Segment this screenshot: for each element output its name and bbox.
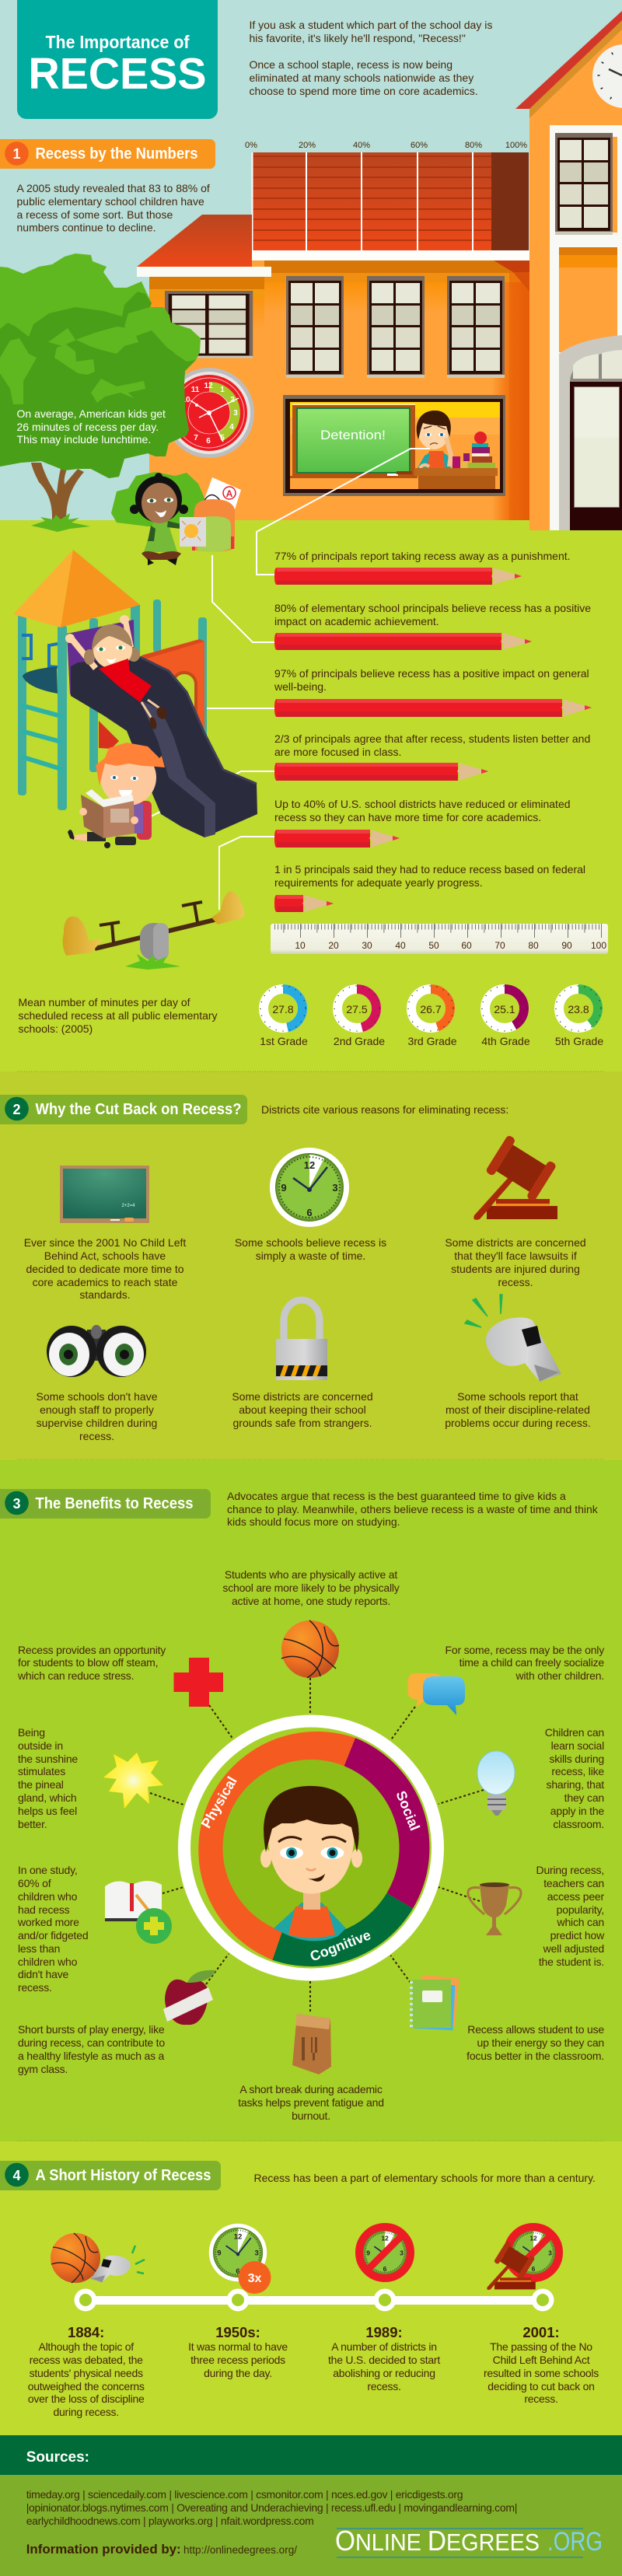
red wall clock [164,368,254,458]
icon: 1950s clock three times: 3x [248,2272,261,2285]
text: socialize: with other children. [515,1669,604,1682]
ruler: 40 [395,940,406,951]
benefit: trophy [468,1882,521,1935]
reason: chalkboard: standards. [79,1288,131,1301]
study text: public elementary school children have [17,195,204,208]
text: social skills: skills during [549,1753,604,1765]
handles [22,635,58,667]
roof scale labels: 0% [245,141,257,150]
3rd grade: 3rd Grade [407,1035,457,1047]
text: peer popularity: predict how [550,1929,605,1942]
roof scale labels: 40% [353,141,370,150]
timeline text: 1989: A number of districts in [331,2340,437,2353]
timeline text: 1884: Although the topic of [38,2340,134,2353]
text: social skills: classroom. [553,1818,604,1830]
text: gym class: Short bursts of play energy, like [18,2023,165,2036]
playground structure [13,550,257,837]
source links: |opinionator.blogs.nytimes.com | Overeating and Underachieving | recess.ufl.edu | movingandlearning.com| [26,2501,517,2514]
callout lines [135,449,430,910]
grass tuft [31,513,90,532]
posts [18,599,207,810]
text: sunshine: gland, which [18,1791,76,1804]
stat 40%: recess so they can have more time for core academics. [274,811,541,823]
girl on slide [65,615,169,730]
reason: chalkboard: Behind Act, schools have [44,1250,166,1262]
reason: gavel: students are injured during [451,1263,580,1275]
section 3 intro: kids should focus more on studying. [227,1515,400,1528]
ruler: 80 [528,940,539,951]
reason: padlock: grounds safe from strangers. [233,1417,372,1429]
red wall clock: 6 [206,437,211,446]
1st grade: 1st Grade [260,1035,308,1047]
timeline text: 1884: outweighed the concerns [28,2380,145,2392]
stat 77% [274,550,571,585]
reason: binoculars [36,1325,158,1442]
boy reading [68,743,165,848]
text: physically active: school are more likely to be physically [222,1582,400,1594]
ruler: 70 [494,940,505,951]
5th grade: 23.8 [568,1003,589,1015]
icon: 1989 prohibited clock [359,2227,411,2278]
reason: binoculars: recess. [79,1430,114,1442]
text: sunshine: helps us feel [18,1805,77,1817]
text: social skills: sharing, that [547,1778,604,1791]
tree caption: This may include lunchtime. [17,433,151,446]
text: gym class: a healthy lifestyle as much as a [18,2050,165,2062]
wheel labels: Physical [198,1774,240,1831]
benefit: red cross [174,1658,223,1707]
section 2 heading [0,1095,247,1124]
text: stress: for students to blow off steam, [18,1656,158,1669]
stat 80% [274,602,591,650]
girl with drawing [130,473,241,565]
timeline text: 1884 [28,2324,145,2418]
red wall clock: 11 [191,386,200,394]
benefit: apple with tape [163,1970,216,2025]
text: sunshine: better. [18,1818,47,1830]
text: social skills: recess, like [551,1765,604,1777]
reason: whistle: most of their discipline-related [446,1403,590,1416]
stat 80%: impact on academic achievement. [274,615,439,627]
text: sunshine: Being [18,1726,45,1739]
timeline text: 1884: 1884: [68,2324,104,2340]
chalkboard: Detention! [320,428,386,442]
timeline text: 1989: recess. [367,2380,401,2392]
study text: numbers continue to decline. [17,221,156,233]
intro text: eliminated at many schools nationwide as they [249,72,473,84]
intro text [249,19,492,97]
roof [13,550,140,627]
reason: gavel: that they'll face lawsuits if [454,1250,577,1262]
red wall clock: 8 [182,422,187,431]
tree caption: 26 minutes of recess per day. [17,421,159,433]
text: focus: up their energy so they can [477,2036,604,2049]
text: short break [238,2083,384,2122]
text: sunshine [18,1726,78,1830]
text: peer popularity: teachers can [543,1877,604,1889]
text: social skills: they can [564,1791,604,1804]
timeline text: 2001: deciding to cut back on [487,2380,595,2392]
reason: clock: simply a waste of time. [256,1250,365,1262]
desk [414,468,498,489]
ruler: 30 [362,940,372,951]
report card: A [226,488,233,499]
reason: gavel: recess. [498,1276,533,1288]
timeline text: 1884: during recess. [53,2406,119,2418]
benefits wheel: Social [393,1788,423,1833]
timeline text: 2001: The passing of the No [490,2340,592,2353]
text: socialize: For some, recess may be the only [446,1644,604,1656]
text: focus: focus better in the classroom. [466,2050,604,2062]
roof scale labels: 100% [505,141,527,150]
red wall clock: 12 [204,382,213,390]
boy portrait [260,1786,362,1941]
background: section 3 [0,1460,622,2141]
text: socialize: time a child can freely socialize [460,1656,604,1669]
stat 1 in 5: requirements for adequate yearly progress. [274,876,483,889]
mean minutes text: Mean number of minutes per day of [19,996,190,1008]
timeline text: 2001 [484,2324,599,2405]
reason: chalkboard: decided to dedicate more time to [26,1263,184,1275]
tree caption: On average, American kids get [17,407,166,420]
timeline [75,2289,554,2311]
title box [17,0,218,119]
text: sunshine: the sunshine [18,1753,78,1765]
backpack [192,495,235,551]
ruler: 100 [591,940,606,951]
windows [165,276,505,378]
information provided by [26,2542,297,2557]
tree caption [17,407,166,446]
benefit: speech bubbles [407,1673,465,1715]
text: social skills: Children can [545,1726,604,1739]
stat 97%: 97% of principals believe recess has a positive impact on general [274,667,589,680]
stat 97%: well-being. [274,680,327,693]
sources band [0,2435,622,2475]
background: section 2 [0,1071,622,1460]
timeline text: 2001: Child Left Behind Act [493,2354,590,2366]
2nd grade [334,986,385,1047]
ruler: 10 [295,940,306,951]
slide [71,657,257,837]
stat 1 in 5: 1 in 5 principals said they had to reduce recess based on federal [274,863,585,876]
section 2 heading: Why the Cut Back on Recess? [36,1101,241,1118]
intro text: If you ask a student which part of the school day is [249,19,492,31]
stat 2/3: are more focused in class. [274,746,401,758]
benefits wheel [178,1715,444,1981]
benefits wheel: Cognitive [308,1927,373,1964]
section 4 heading: A Short History of Recess [36,2167,211,2184]
text: focus: Recess allows student to use [467,2023,604,2036]
detention classroom window [283,395,505,496]
mean minutes text [19,996,218,1035]
roof scale labels: 80% [465,141,482,150]
text: peer popularity: popularity, [557,1903,604,1916]
background: grass section 1 [0,520,622,1071]
timeline text: 1950s: three recess periods [190,2354,285,2366]
3rd grade [407,986,457,1047]
text: focus [466,2023,604,2062]
4th grade: 4th Grade [481,1035,530,1047]
books and apple [453,432,495,468]
text: social skills [545,1726,604,1830]
reason: chalkboard [24,1166,186,1301]
reason: clock [235,1148,386,1262]
text: physically active: Students who are physically active at [225,1568,397,1581]
text: sunshine: outside in [18,1739,63,1752]
text: peer popularity: well adjusted [543,1942,604,1955]
body [142,521,181,565]
reason: binoculars: enough staff to properly [40,1403,154,1416]
text: peer popularity: the student is. [539,1956,604,1968]
red wall clock: 1 [220,386,225,394]
ruler: 90 [561,940,572,951]
orange panel [142,639,204,739]
reason: chalkboard: 2+2=4 [121,1204,135,1208]
3rd grade: 26.7 [420,1003,442,1015]
seesaw [63,891,244,970]
ruler: 50 [428,940,439,951]
logo: ONLINE DEGREES [335,2525,540,2557]
text: gym class: during recess, can contribute to [18,2036,165,2049]
donut charts [260,986,603,1047]
benefit: notebook [411,1975,460,2030]
section 3 intro: Advocates argue that recess is the best guaranteed time to give kids a [227,1490,566,1502]
mean minutes text: scheduled recess at all public elementary [19,1009,218,1022]
reason: padlock: Some districts are concerned [232,1390,373,1403]
study text: a recess of some sort. But those [17,208,173,221]
dotted connectors [150,1678,484,2014]
1st grade [260,986,308,1047]
cognitive segment [272,1893,413,1966]
physical segment [198,1732,355,1960]
tree [0,253,201,521]
timeline text: 1884: recess was debated, the [30,2354,143,2366]
reason: chalkboard: Ever since the 2001 No Child Left [24,1236,186,1249]
ruler: 20 [328,940,339,951]
intro text: Once a school staple, recess is now being [249,58,453,71]
ruler [271,924,608,954]
platform [23,666,58,694]
section 3 intro [227,1490,599,1528]
stat 77%: 77% of principals report taking recess away as a punishment. [274,550,571,562]
background: sky [0,0,622,520]
text: sunshine: stimulates [18,1765,65,1777]
reason: clock: Some schools believe recess is [235,1236,386,1249]
title box: RECESS [28,49,207,99]
text: fidgeted: In one study, [18,1864,78,1876]
bush [111,472,208,526]
text: fidgeted: recess. [18,1981,52,1994]
benefit: book with plus [105,1881,172,1944]
text: fidgeted [17,1864,88,1994]
source links: earlychildhoodnews.com | playworks.org | nfait.wordpress.com [26,2515,313,2527]
timeline text: 1989: the U.S. decided to start [328,2354,440,2366]
section 3 heading: The Benefits to Recess [36,1495,193,1512]
text: peer popularity: which can [557,1916,604,1928]
stat 2/3 [274,732,590,781]
timeline text: 2001: 2001: [522,2324,560,2340]
purple panel [67,620,135,694]
section 4 heading: 4 [12,2168,21,2183]
red wall clock: 5 [220,434,225,442]
text: fidgeted: and/or fidgeted [18,1929,88,1942]
text: stress: which can reduce stress. [17,1669,134,1682]
section 4 intro: Recess has been a part of elementary schools for more than a century. [253,2172,596,2184]
timeline text: 1989: abolishing or reducing [333,2367,435,2379]
sources band: Sources: [26,2449,89,2466]
icon: 1884 ball and whistle [51,2233,145,2283]
ladder rungs [21,705,64,770]
stat 97% [274,667,592,717]
intro text: choose to spend more time on core academics. [249,85,478,97]
mean minutes text: schools: (2005) [19,1022,93,1035]
text: sunshine: the pineal [18,1778,64,1791]
timeline text: 1884: students' physical needs [30,2367,143,2379]
roof scale labels: 60% [411,141,428,150]
main roof [252,152,529,260]
study text: A 2005 study revealed that 83 to 88% of [17,182,210,194]
background: section 4 [0,2141,622,2435]
4th grade [481,986,530,1047]
section 4 heading [0,2161,221,2190]
section 3 heading: 3 [12,1496,21,1512]
social segment [344,1738,429,1908]
logo: .ORG [547,2527,603,2557]
section 2 intro: Districts cite various reasons for eliminating recess: [261,1103,508,1116]
section 3 intro: chance to play. Meanwhile, others believe recess is a waste of time and think [227,1503,599,1515]
pencil bars with captions [274,550,592,912]
timeline text: 1950s: It was normal to have [188,2340,288,2353]
information provided by: http://onlinedegrees.org/ [183,2543,297,2556]
reason: whistle: Some schools report that [457,1390,578,1403]
reason: whistle [445,1295,591,1429]
icon: 2001 prohibited clock and gavel [487,2227,559,2290]
sun drawing [180,517,206,547]
red wall clock: 2 [230,396,235,404]
text: social skills: learn social [551,1739,604,1752]
text: short break: A short break during academic [239,2083,383,2095]
timeline text: 1950s: 1950s: [215,2324,260,2340]
red wall clock: 3 [233,409,238,418]
text: stress: Recess provides an opportunity [18,1644,166,1656]
stat 2/3: 2/3 of principals agree that after recess, students listen better and [274,732,590,745]
text: fidgeted: 60% of [18,1877,51,1889]
benefit: lunch bag [292,2014,331,2074]
timeline text: 1989 [328,2324,440,2392]
4th grade: 25.1 [494,1003,515,1015]
section 1 heading: 1 [12,146,21,162]
reason: binoculars: Some schools don't have [36,1390,158,1403]
red wall clock: 10 [181,396,190,404]
text: short break: tasks helps prevent fatigue and [238,2096,384,2109]
section 1 heading [0,139,215,169]
study text [17,182,210,233]
stat 1 in 5 [274,863,585,912]
reason: binoculars: supervise children during [37,1417,157,1429]
section 1 heading: Recess by the Numbers [36,145,197,163]
text: fidgeted: worked more [17,1916,79,1928]
timeline text: 2001: recess. [524,2392,558,2405]
benefit: basketball [281,1620,339,1678]
red wall clock: 4 [229,423,234,432]
boy at desk [417,411,451,468]
benefit: light bulb [477,1751,515,1816]
roof scale labels: 20% [299,141,316,150]
reason: gavel: Some districts are concerned [445,1236,586,1249]
stat 40% [274,798,571,848]
text: peer popularity: access peer [547,1890,605,1903]
1st grade: 27.8 [272,1003,294,1015]
ruler: 60 [461,940,472,951]
red wall clock: 7 [194,434,198,442]
2nd grade: 2nd Grade [334,1035,385,1047]
text: fidgeted: less than [18,1942,60,1955]
source links [26,2488,517,2527]
timeline text: 1950s: during the day. [204,2367,272,2379]
text: gym class [18,2023,165,2075]
reason: padlock [232,1300,373,1429]
report card [202,477,241,519]
chalkboard [290,404,418,478]
reason: gavel [445,1134,586,1288]
icon: 1950s clock three times [209,2224,271,2294]
text: gym class: gym class. [18,2063,68,2075]
reason: whistle: problems occur during recess. [445,1417,591,1429]
title box: The Importance of [45,32,190,52]
timeline text: 1950s [188,2324,288,2379]
5th grade [555,986,603,1047]
text: socialize [446,1644,604,1682]
5th grade: 5th Grade [555,1035,603,1047]
text: fidgeted: didn't have [18,1968,68,1980]
roof scale labels [245,141,527,150]
stat 40%: Up to 40% of U.S. school districts have reduced or eliminated [274,798,571,810]
text: physically active [222,1568,400,1607]
timeline text: 1989: 1989: [365,2324,403,2340]
footer panel [0,2475,622,2576]
2nd grade: 27.5 [346,1003,368,1015]
information provided by: Information provided by: [26,2542,181,2557]
section 3 heading [0,1489,211,1519]
text: physically active: active at home, one study reports. [232,1595,390,1607]
text: peer popularity: During recess, [536,1864,604,1876]
reason: padlock: about keeping their school [239,1403,366,1416]
text: peer popularity [536,1864,605,1968]
benefit: sun [103,1753,163,1809]
intro text: his favorite, it's likely he'll respond, "Recess!" [249,32,466,44]
text: stress [17,1644,166,1682]
head [130,473,188,523]
text: fidgeted: children who [18,1956,78,1968]
school building [137,11,622,530]
tower [515,11,622,530]
side roof [137,215,271,277]
section 2 heading: 2 [12,1102,21,1117]
timeline text: 2001: resulted in some schools [484,2367,599,2379]
reason: chalkboard: core academics to reach state [33,1276,178,1288]
text: social skills: apply in the [550,1805,604,1817]
text: fidgeted: children who [18,1890,78,1903]
timeline text: 1884: over the loss of discipline [28,2392,145,2405]
source links: timeday.org | sciencedaily.com | livescience.com | csmonitor.com | nces.ed.gov | ericdigests.org [26,2488,463,2501]
text: short break: burnout. [292,2109,330,2122]
text: fidgeted: had recess [18,1903,70,1916]
main wall [149,260,529,520]
stat 80%: 80% of elementary school principals believe recess has a positive [274,602,591,614]
